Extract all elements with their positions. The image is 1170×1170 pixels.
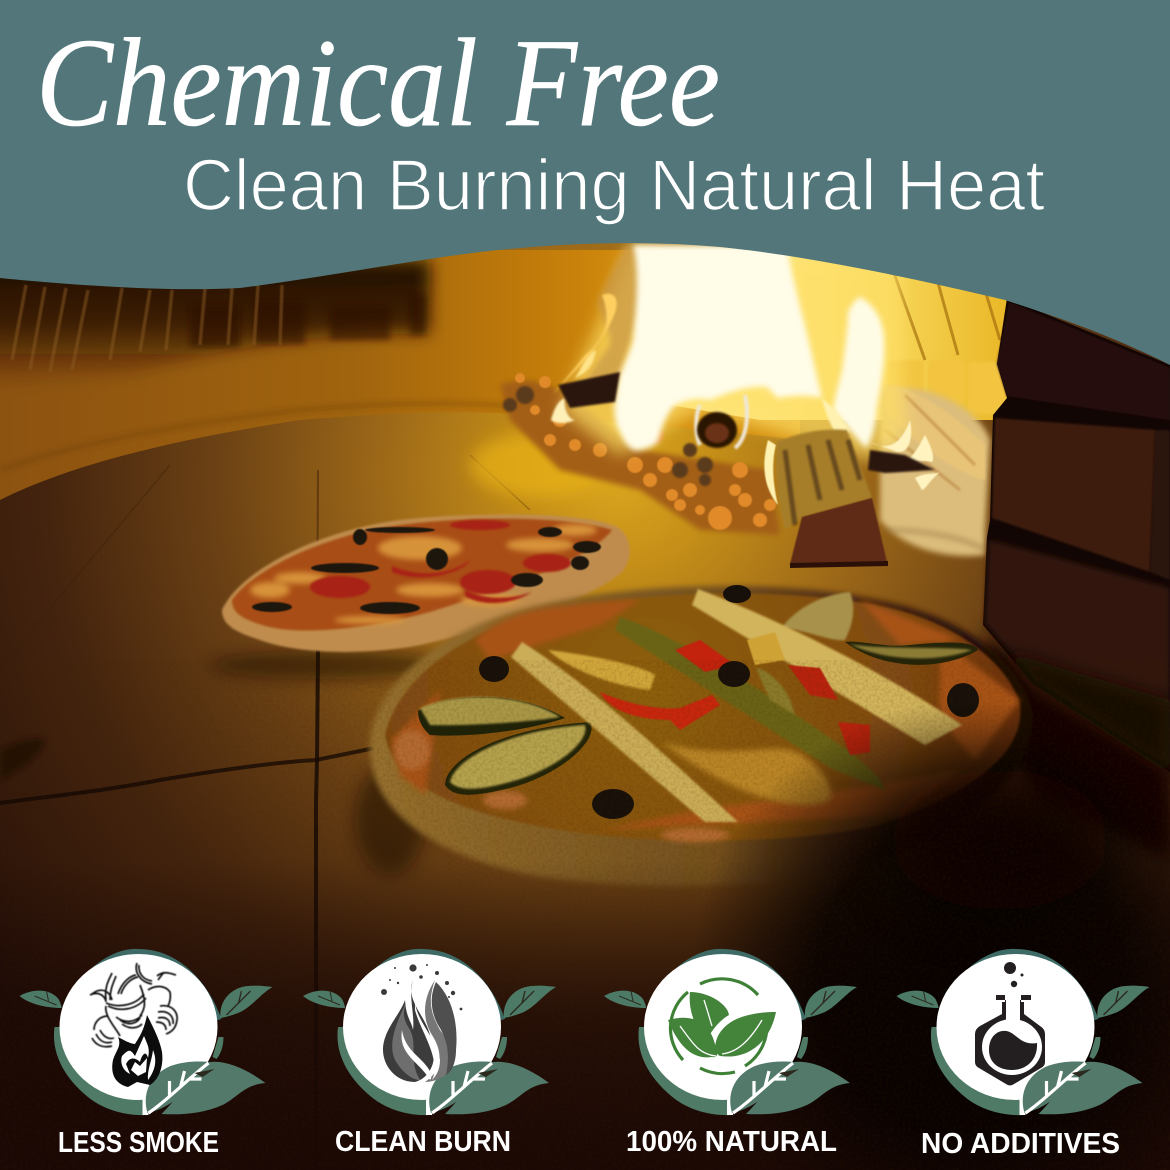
logs: [558, 372, 935, 568]
icon: smoke and flame: [90, 963, 177, 1087]
oven back wall: [0, 250, 1010, 500]
badge: clean burn: [303, 949, 556, 1115]
embers and ash bed: [500, 373, 990, 556]
icon: grey flame with sparks: [381, 964, 462, 1082]
badge: 100% natural: [604, 949, 857, 1115]
badge: no additives: [896, 949, 1150, 1115]
title: Chemical Free: Chemical Free: [36, 14, 720, 153]
foreground shadows: [0, 640, 1170, 1170]
icon: three green leaves in a ring: [668, 979, 776, 1074]
label: 100% natural: 100% NATURAL: [626, 1126, 837, 1158]
label: clean burn: CLEAN BURN: [335, 1126, 511, 1158]
pizza shadows on the floor: [210, 651, 450, 875]
floor cracks and slabs: [0, 455, 1000, 1170]
fire flames: [551, 245, 940, 505]
pizza toppings: [418, 585, 979, 822]
front pizza: [370, 585, 1033, 886]
header banner: [0, 0, 1170, 365]
label: less smoke: LESS SMOKE: [58, 1127, 219, 1159]
surface grain on the lower floor: [0, 660, 1170, 1170]
floor glow near the fire: [470, 433, 610, 497]
brick oven entrance pillar: [983, 298, 1170, 860]
badge: less smoke: [20, 949, 272, 1115]
subtitle: Clean Burning Natural Heat: Clean Burning Natural Heat: [183, 146, 1045, 226]
label: no additives: NO ADDITIVES: [921, 1128, 1120, 1160]
icon: chemistry flask with bubbles: [975, 962, 1045, 1086]
back pizza: [222, 515, 630, 652]
